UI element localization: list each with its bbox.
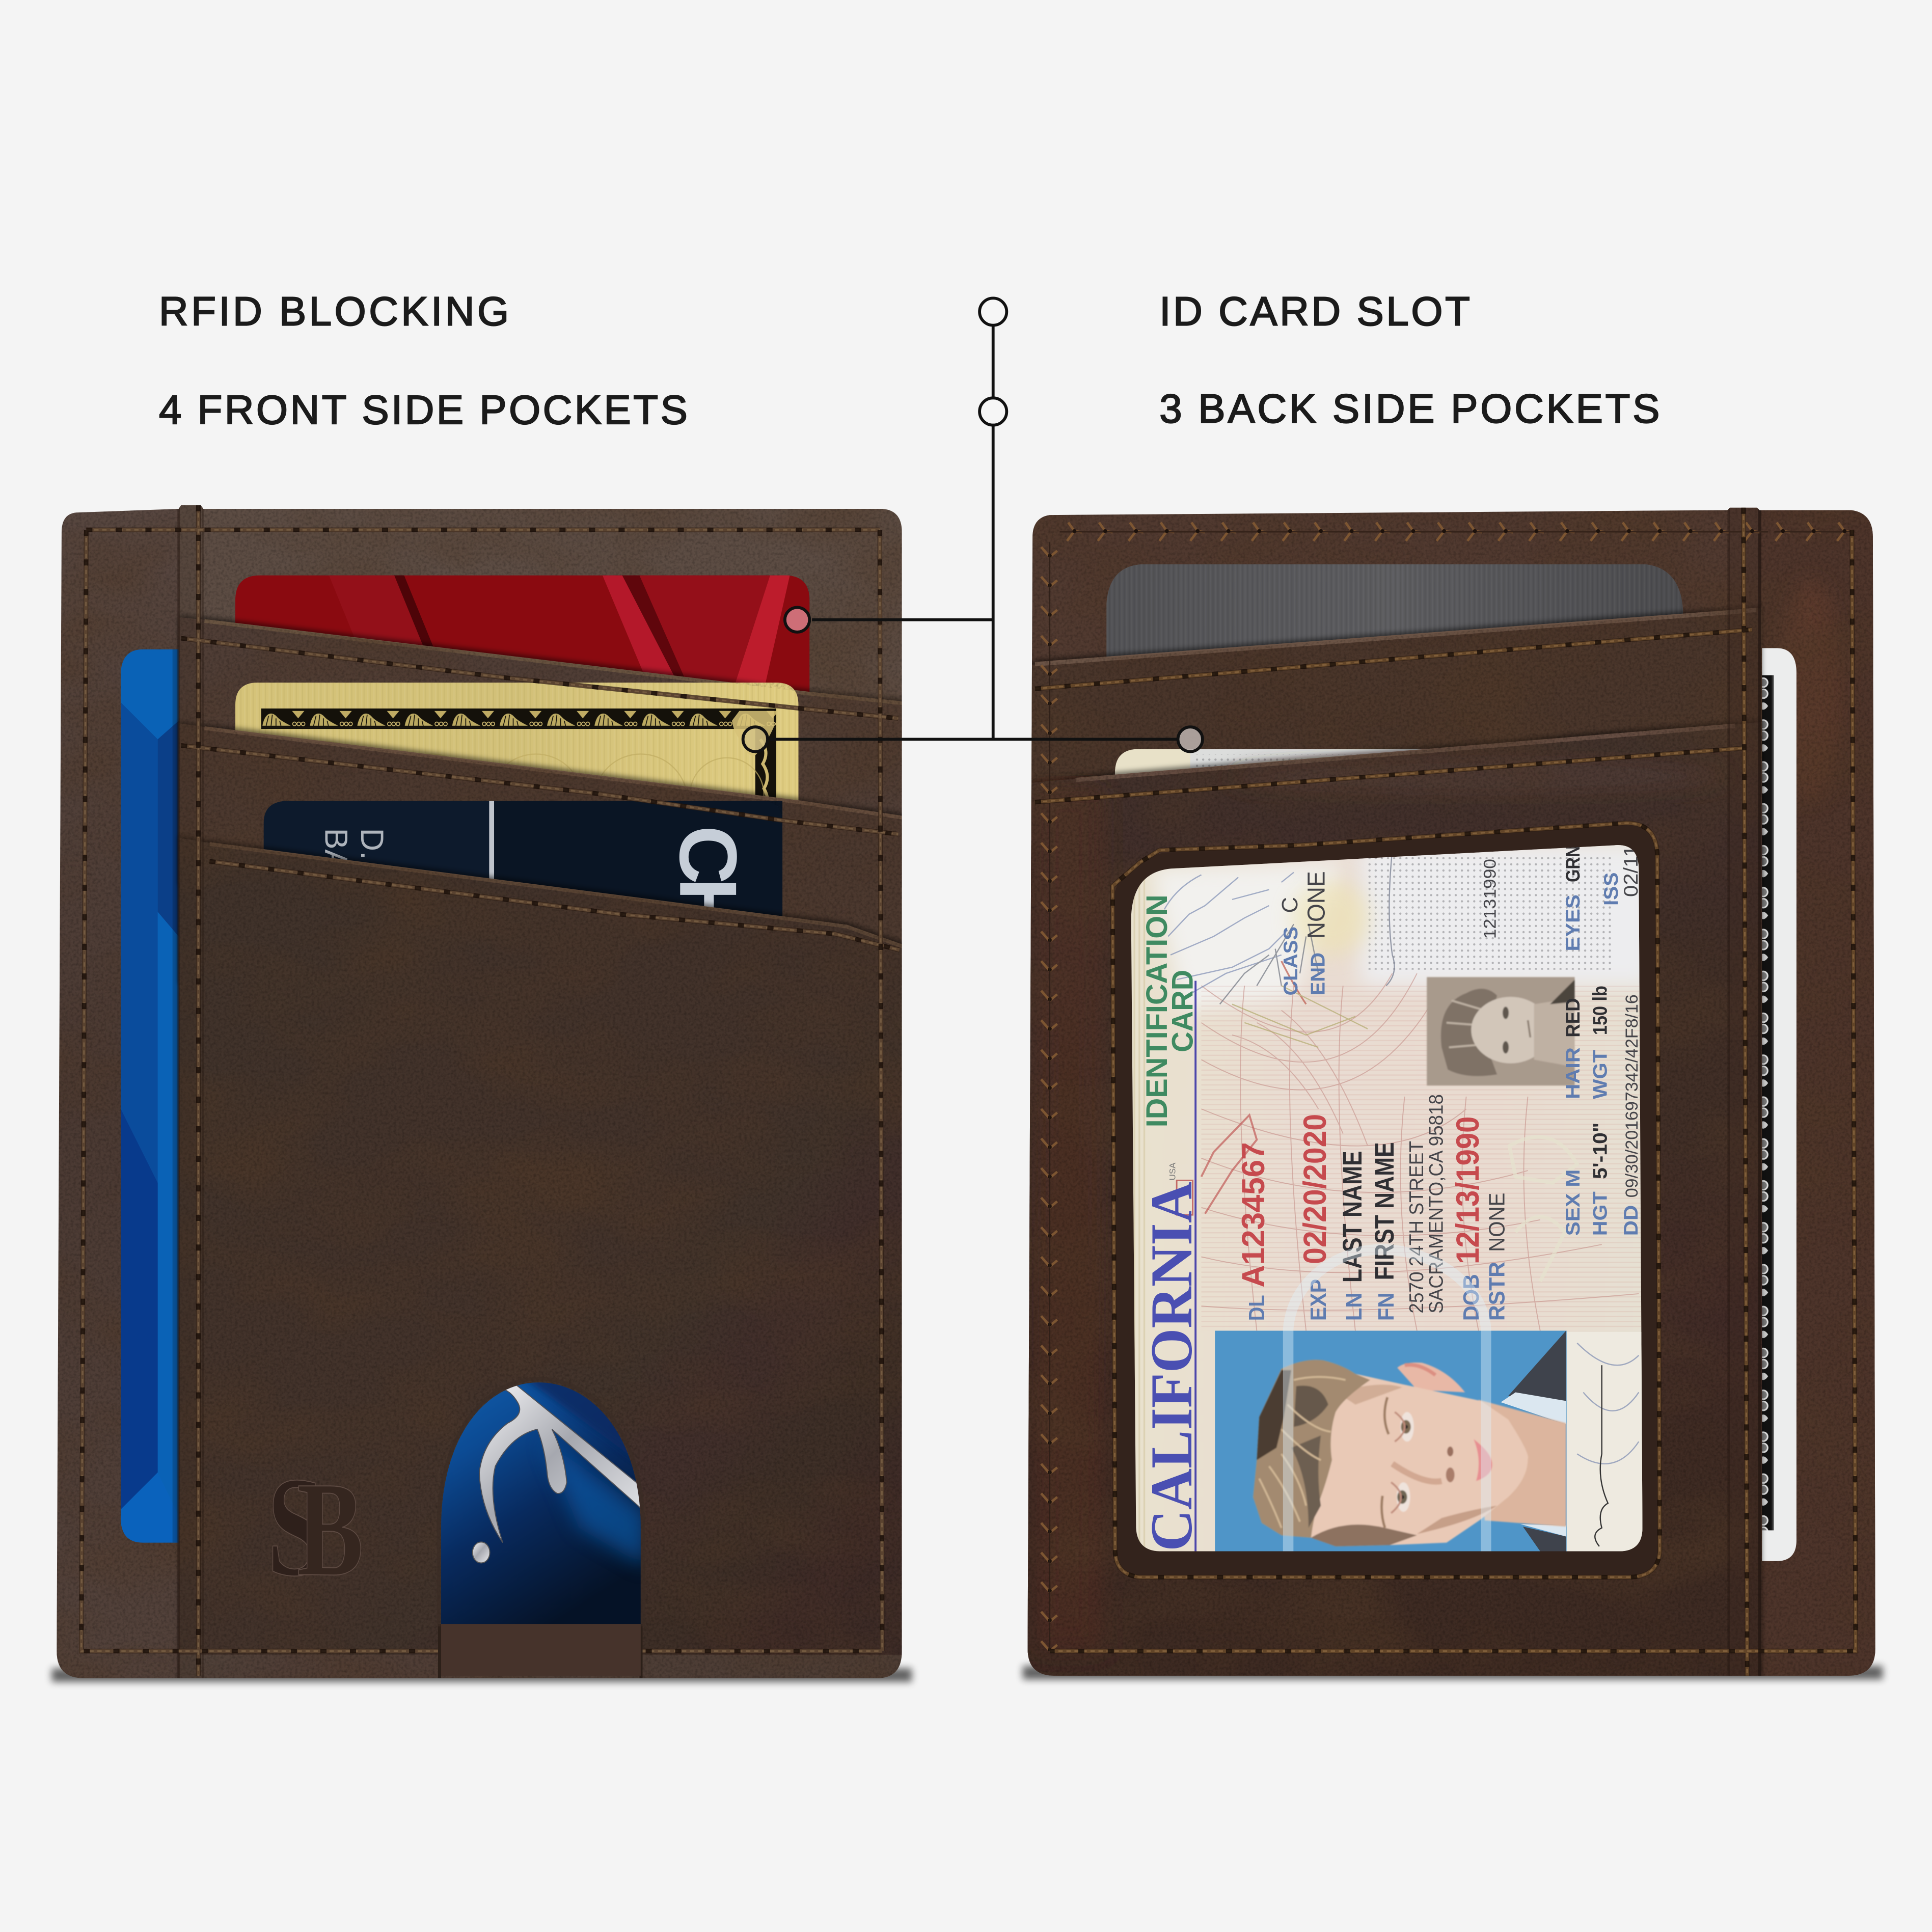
ID data fields: FIRST NAME	[1370, 1142, 1400, 1280]
heading: RFID blocking: RFID BLOCKING	[159, 289, 509, 334]
marker: ID card slot	[1178, 727, 1203, 752]
ID data fields: WGT	[1589, 1050, 1611, 1099]
ID data fields: GRN	[1562, 845, 1584, 882]
leather texture	[1023, 499, 1885, 1688]
marker: red card	[785, 608, 809, 632]
ID data fields: 09/30/201697342/42F8/16	[1622, 994, 1642, 1198]
ID data fields: 12131990	[1481, 859, 1500, 939]
marker: gold card	[743, 727, 768, 752]
ID data fields: FN	[1374, 1293, 1399, 1321]
ID data fields: NONE	[1485, 1193, 1510, 1252]
window frame	[1112, 826, 1659, 1577]
marker: lower label node	[979, 398, 1006, 425]
logo: embossed SB monogram: S	[267, 1447, 324, 1606]
ID data fields: 02/20/2020	[1297, 1114, 1333, 1264]
pocket: second front pocket	[179, 723, 906, 986]
ID data fields: DD	[1620, 1205, 1642, 1236]
card: red card	[235, 576, 810, 692]
pocket: large front pocket	[179, 838, 912, 1688]
ID heading text: CALIFORNIA	[1139, 1182, 1205, 1552]
ID data fields: RED	[1562, 998, 1584, 1038]
ID data fields: DOB	[1459, 1274, 1484, 1321]
signature	[1595, 1365, 1608, 1546]
heading: ID card slot: ID CARD SLOT	[1159, 289, 1470, 334]
back stitching: chevrons along left and top edges	[1038, 520, 1855, 1651]
ID data fields: SACRAMENTO,CA 95818	[1426, 1094, 1448, 1314]
card: navy bank card	[264, 801, 782, 973]
pocket: lower back pocket	[1023, 722, 1762, 1688]
ID heading text: IDENTIFICATION	[1140, 894, 1174, 1127]
pocket: first front pocket	[179, 617, 906, 887]
card: navy bank card: CH	[663, 826, 754, 936]
leather texture	[49, 499, 912, 1688]
ID data fields: ISS	[1600, 873, 1622, 906]
ID data fields: 150 lb	[1589, 986, 1611, 1035]
small ghost photo	[1427, 977, 1574, 1085]
right flap	[1759, 505, 1876, 1682]
ID data fields: RSTR	[1485, 1262, 1510, 1321]
card: navy bank card: BA	[318, 828, 354, 871]
ID data fields	[1236, 845, 1642, 1321]
ID data fields: C	[1278, 897, 1302, 913]
ID data fields: 2570 24TH STREET	[1406, 1141, 1428, 1314]
back seam strip	[1727, 503, 1761, 1685]
ID data fields: HGT	[1589, 1191, 1611, 1236]
main ID photo	[1215, 1331, 1567, 1552]
ID data fields: END	[1307, 953, 1329, 996]
logo: embossed SB monogram: B	[297, 1454, 364, 1604]
ID data fields: EXP	[1307, 1279, 1331, 1321]
ID data fields: DL	[1245, 1295, 1269, 1321]
heading: 3 back side pockets: 3 BACK SIDE POCKETS	[1159, 386, 1659, 431]
card: gold card	[235, 683, 799, 848]
ID data fields: NONE	[1302, 871, 1330, 939]
card: navy bank card: D.	[354, 828, 390, 860]
ID heading text: CARD	[1166, 970, 1200, 1052]
ID data fields: 5'-10"	[1589, 1123, 1611, 1179]
pocket: upper back pocket	[1023, 608, 1762, 887]
stitching	[81, 505, 900, 1676]
plastic window reflections	[1288, 1249, 1486, 1553]
stitching	[1035, 508, 1856, 1676]
ID heading text: USA	[1168, 1162, 1178, 1180]
connector lines and markers	[743, 298, 1203, 752]
card: white card with patterned edge	[1750, 648, 1797, 1561]
panel: back of wallet	[1023, 499, 1885, 1688]
ID data fields: LN	[1342, 1293, 1367, 1321]
marker: upper label node	[979, 298, 1006, 325]
ID data fields: LAST NAME	[1338, 1151, 1368, 1283]
ID card in window	[1121, 838, 1651, 1565]
ID heading text	[1139, 894, 1205, 1552]
ID data fields: HAIR	[1562, 1047, 1584, 1099]
ID data fields: SEX M	[1562, 1169, 1584, 1236]
thumb cutout with blue card and anchor emblem	[431, 1368, 653, 1678]
card: gray metal card	[1106, 564, 1683, 702]
ID data fields: 02/11	[1620, 845, 1642, 897]
ID data fields: 12/13/1990	[1450, 1117, 1486, 1264]
card: ID card peeking out	[1115, 749, 1474, 813]
ID data fields: EYES	[1562, 894, 1584, 951]
ID data fields: CLASS	[1280, 927, 1302, 996]
panel: front of wallet	[49, 499, 912, 1688]
heading: 4 front side pockets: 4 FRONT SIDE POCKETS	[159, 387, 688, 432]
card: blue card at left	[121, 649, 185, 1543]
ID data fields: A1234567	[1236, 1142, 1271, 1288]
central seam strip	[177, 503, 204, 1685]
